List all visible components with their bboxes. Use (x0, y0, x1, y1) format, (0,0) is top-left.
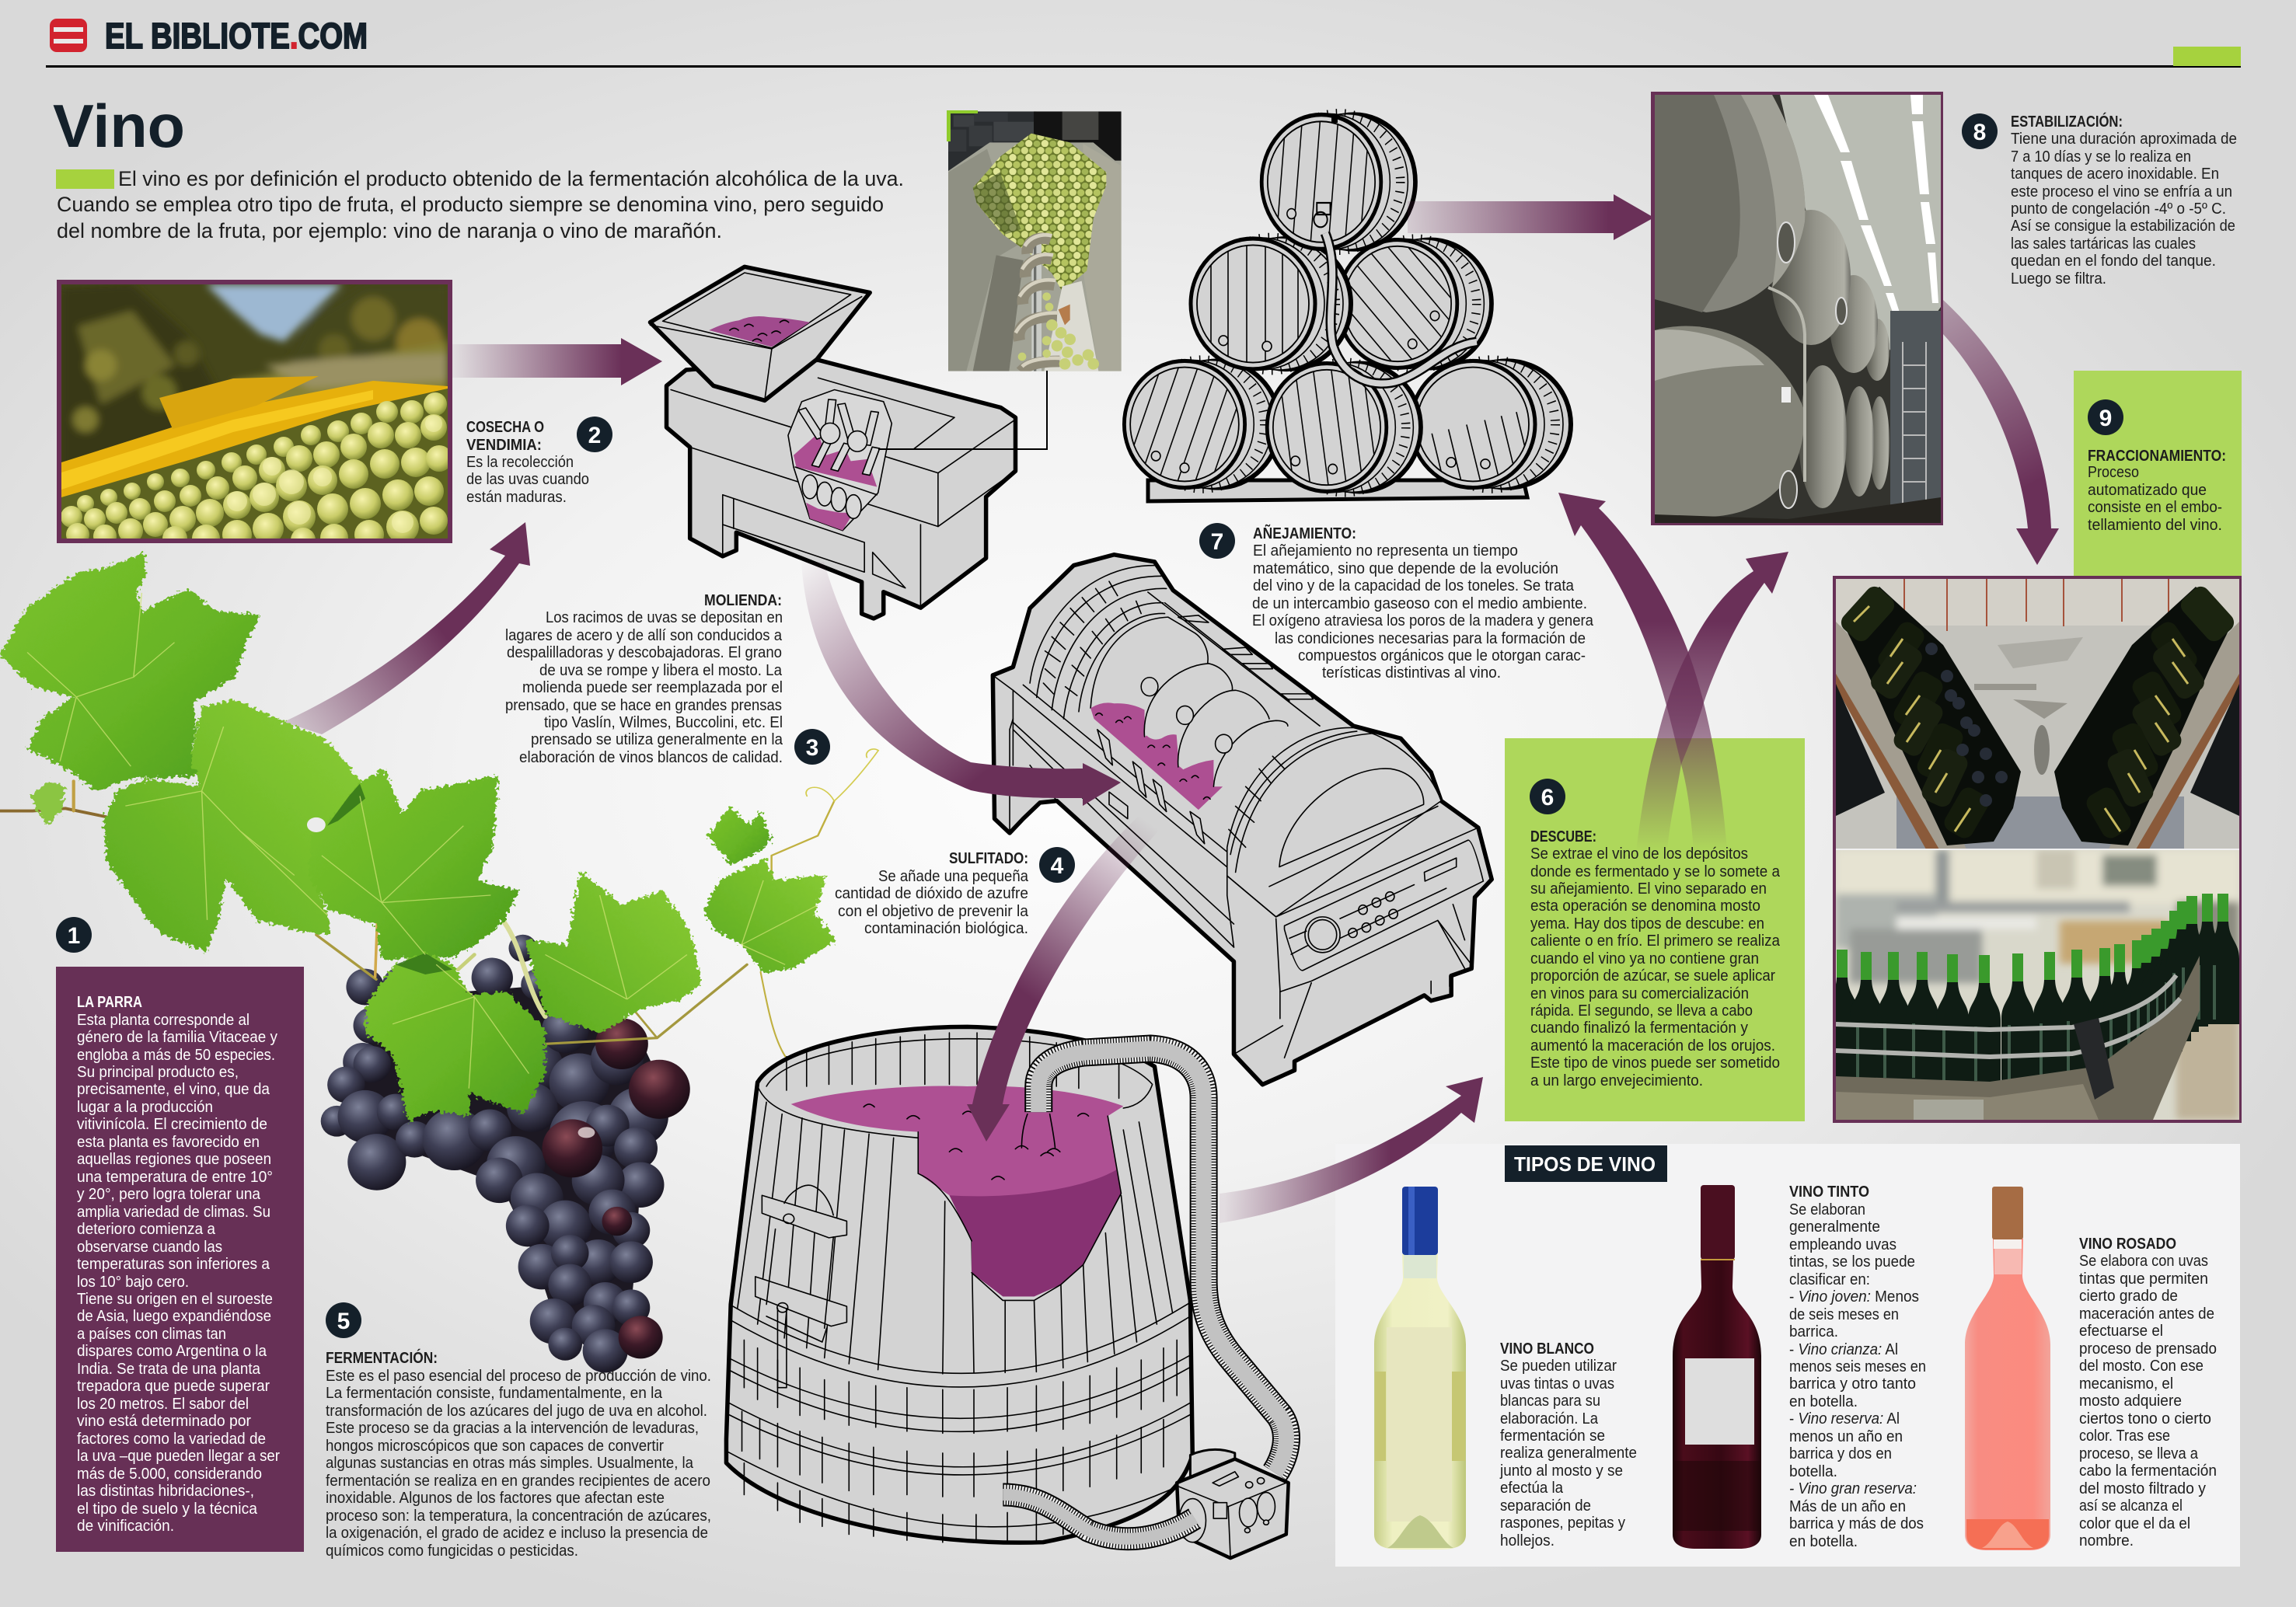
text: vino rosado: proceso, se lleva a (2079, 1445, 2199, 1462)
text: estabilizacion: Tiene una duración aproximada de (2011, 131, 2237, 148)
number 4: 4 (1051, 853, 1064, 879)
text: vino tinto: - Vino crianza: Al (1789, 1341, 1898, 1358)
text: fermentacion: químicos como fungicidas o pesticidas. (326, 1543, 578, 1560)
text: vino tinto: en botella. (1789, 1393, 1858, 1410)
panel: la parra: vino está determinado por (77, 1413, 251, 1430)
text: vino tinto: clasificar en: (1789, 1271, 1870, 1288)
intro text (56, 167, 904, 242)
text: fermentacion: FERMENTACIÓN: (326, 1348, 438, 1367)
panel: descube: proporción de azúcar, se suele aplicar (1530, 967, 1775, 985)
panel: la parra: la uva –que pueden llegar a ser (77, 1448, 280, 1465)
text: sulfitado: con el objetivo de prevenir la (838, 903, 1029, 920)
panel: la parra: los 10° bajo cero. (77, 1274, 189, 1291)
text: anejamiento: del vino y de la capacidad de los toneles. Se trata (1253, 577, 1575, 594)
text: vino rosado: maceración antes de (2079, 1305, 2214, 1323)
connector line (878, 371, 1047, 449)
header rule (46, 65, 2241, 68)
text: vino tinto: - Vino joven: Menos (1789, 1288, 1919, 1305)
text: vino tinto: barrica y otro tanto (1789, 1375, 1916, 1393)
text: vino tinto (1789, 1183, 1926, 1550)
barrel bottom middle (1267, 350, 1421, 505)
text: anejamiento: compuestos orgánicos que le otorgan carac- (1298, 647, 1586, 664)
panel: la parra: de vinificación. (77, 1518, 174, 1535)
text: estabilizacion: este proceso el vino se enfría a un (2011, 183, 2232, 200)
number 5 (326, 1302, 361, 1338)
heading: TIPOS DE VINO (1514, 1152, 1656, 1176)
text: vino tinto: en botella. (1789, 1533, 1858, 1550)
arrow: vat to descube (1220, 1077, 1483, 1223)
text: anejamiento: de un intercambio gaseoso con el medio ambiente. (1252, 595, 1587, 612)
text: vino tinto: generalmente (1789, 1218, 1880, 1236)
arrow: vine to harvest (284, 522, 530, 734)
panel: fraccionamiento: tellamiento del vino. (2088, 517, 2222, 534)
arrow: harvest to crusher (452, 338, 662, 385)
photo frame: bottling (1826, 576, 2242, 1123)
panel: descube: caliente o en frío. El primero se realiza (1530, 932, 1781, 950)
text: molienda: prensado se utiliza generalmente en la (531, 731, 783, 748)
text: fermentacion: Este proceso se da gracias a la intervención de levaduras, (326, 1420, 699, 1437)
text: vino blanco: VINO BLANCO (1500, 1340, 1594, 1358)
text: vino rosado: del mosto. Con ese (2079, 1358, 2204, 1375)
photo: grape harvest (57, 280, 452, 553)
number 1: 1 (68, 923, 80, 949)
text: vino rosado: VINO ROSADO (2079, 1236, 2176, 1253)
text: vino blanco: Se pueden utilizar (1500, 1358, 1617, 1375)
text: vino blanco (1499, 1340, 1637, 1549)
panel: descube: Se extrae el vino de los depósitos (1530, 845, 1748, 863)
text: vino blanco: fermentación se (1500, 1427, 1605, 1445)
text: estabilizacion: quedan en el fondo del tanque. (2011, 253, 2216, 270)
text: estabilizacion: tanques de acero inoxidable. En (2011, 166, 2219, 183)
number 9: 9 (2099, 406, 2112, 431)
bottle: red (1673, 1185, 1761, 1549)
pipe (1325, 233, 1477, 384)
panel: fraccionamiento (2074, 371, 2242, 577)
heading (1505, 1145, 1667, 1182)
panel: la parra: Su principal producto es, (77, 1064, 239, 1081)
text: vino rosado: mosto adquiere (2079, 1393, 2182, 1410)
wine in drum (1090, 702, 1223, 810)
header green tab (2173, 47, 2241, 66)
panel: descube: cuando el vino ya no contiene gran (1530, 950, 1759, 967)
green corner (947, 110, 978, 141)
panel: fraccionamiento: automatizado que (2088, 482, 2207, 499)
text: cosecha: Es la recolección (466, 454, 574, 471)
panel: la parra: las distintas hibridaciones-, (77, 1483, 254, 1500)
text: vino rosado: Se elabora con uvas (2079, 1253, 2208, 1270)
text: sulfitado: contaminación biológica. (864, 920, 1028, 937)
text: fermentacion: la oxigenación, el grado de acidez e incluso la presencia de (326, 1525, 708, 1542)
text: vino blanco: efectúa la (1500, 1480, 1564, 1497)
leaves (0, 553, 878, 1123)
panel: fraccionamiento: consiste en el embo- (2088, 499, 2222, 516)
panel: la parra: lugar a la producción (77, 1099, 213, 1116)
text: vino tinto: Más de un año en (1789, 1498, 1906, 1515)
panel: descube: su añejamiento. El vino separado en (1530, 880, 1767, 898)
panel: la parra: LA PARRA (77, 994, 142, 1011)
text: vino rosado: efectuarse el (2079, 1323, 2163, 1340)
barrel middle right (1345, 235, 1494, 373)
text: vino tinto: - Vino reserva: Al (1789, 1410, 1900, 1427)
text: vino rosado: color. Tras ese (2079, 1427, 2170, 1445)
panel: la parra: una temperatura de entre 10° (77, 1169, 273, 1186)
text: vino tinto: de seis meses en (1789, 1306, 1899, 1323)
barrel middle left (1191, 230, 1351, 378)
panel: descube: rápida. El segundo, se lleva a cabo (1530, 1002, 1753, 1020)
text: vino rosado: proceso de prensado (2079, 1340, 2217, 1358)
text: vino blanco: hollejos. (1500, 1532, 1555, 1549)
number 8: 8 (1973, 120, 1986, 145)
text: sulfitado: SULFITADO: (949, 850, 1028, 867)
text: estabilizacion: punto de congelación -4º o -5º C. (2011, 200, 2226, 218)
text: anejamiento: El oxígeno atraviesa los poros de la madera y genera (1252, 612, 1594, 629)
panel: la parra: género de la familia Vitaceae y (77, 1029, 277, 1046)
text: fermentacion: proceso son: la temperatura, la concentración de azúcares, (326, 1508, 711, 1525)
text: molienda: lagares de acero y de allí son conducidos a (505, 627, 783, 644)
text: vino blanco: junto al mosto y se (1499, 1462, 1623, 1480)
text: vino rosado: así se alcanza el (2079, 1497, 2183, 1515)
crusher illustration (650, 267, 1015, 619)
panel: la parra (56, 967, 304, 1552)
text: vino blanco: realiza generalmente (1500, 1445, 1637, 1462)
text: vino tinto: Se elaboran (1789, 1201, 1865, 1218)
photo: riddling racks (1836, 579, 2239, 849)
text: fermentacion: inoxidable. Algunos de los factores que afectan este (326, 1490, 665, 1507)
panel: la parra: más de 5.000, considerando (77, 1466, 262, 1483)
intro text: El vino es por definición el producto obtenido de la fermentación alcohólica de la uva. (118, 167, 904, 190)
text: vino blanco: blancas para su (1500, 1393, 1600, 1410)
text: vino rosado: mecanismo, el (2079, 1375, 2173, 1393)
base (1148, 480, 1527, 501)
text: vino tinto: tintas, se los puede (1789, 1253, 1915, 1271)
stems and tendrils (0, 749, 878, 1056)
number 8 (1962, 113, 1998, 149)
text: fermentacion: hongos microscópicos que son capaces de convertir (326, 1438, 664, 1455)
text: vino rosado (2079, 1236, 2217, 1549)
text: vino rosado: cabo la fermentación (2079, 1462, 2217, 1480)
bottle: white (1374, 1187, 1466, 1549)
text: anejamiento: matemático, sino que depende de la evolución (1253, 560, 1558, 577)
panel: la parra: a países con climas tan (77, 1326, 226, 1343)
text: sulfitado: cantidad de dióxido de azufre (835, 885, 1028, 902)
photo: bottling line (1826, 850, 2239, 1120)
text: sulfitado (835, 850, 1029, 937)
number 3: 3 (806, 735, 818, 761)
panel: la parra: precisamente, el vino, que da (77, 1081, 270, 1098)
panel: la parra: esta planta es favorecido en (77, 1134, 260, 1151)
text: molienda: prensado, que se hace en grandes prensas (505, 697, 782, 714)
text: cosecha (466, 419, 589, 506)
number 7 (1199, 523, 1235, 559)
panel: la parra: observarse cuando las (77, 1239, 222, 1256)
panel: descube: en vinos para su comercialización (1530, 985, 1749, 1002)
front dome (1227, 727, 1441, 917)
text: vino tinto: barrica y más de dos (1789, 1515, 1924, 1532)
number 4 (1039, 847, 1075, 883)
text: vino rosado: nombre. (2079, 1532, 2134, 1549)
text: molienda: tipo Vaslín, Wilmes, Buccolini, etc. El (544, 714, 783, 731)
text: vino tinto: botella. (1789, 1463, 1837, 1480)
press illustration (993, 555, 1492, 1085)
number 5: 5 (337, 1309, 350, 1334)
text: molienda: molienda puede ser reemplazada por el (522, 679, 783, 696)
panel: descube: donde es fermentado y se lo somete a (1530, 863, 1781, 880)
arrow pair: descube to barrels and tank (1558, 493, 1788, 851)
panel: descube (1505, 738, 1805, 1121)
number 2: 2 (588, 423, 601, 448)
text: vino tinto: empleando uvas (1789, 1236, 1896, 1253)
photo: screw conveyor (948, 111, 1122, 371)
text: vino tinto: barrica. (1789, 1323, 1838, 1340)
barrel bottom left (1122, 355, 1275, 493)
panel: descube: Este tipo de vinos puede ser sometido (1530, 1054, 1780, 1072)
text: molienda: despalilladoras y descobajadoras. El grano (507, 644, 782, 661)
grapes in hopper (709, 316, 810, 347)
panel: la parra: India. Se trata de una planta (77, 1361, 261, 1378)
text: cosecha: están maduras. (466, 489, 567, 506)
panel: la parra: los 20 metros. El sabor del (77, 1396, 249, 1413)
intro text: del nombre de la fruta, por ejemplo: vino de naranja o vino de marañón. (57, 219, 722, 242)
panel: descube: yema. Hay dos tipos de descube: en (1530, 915, 1764, 932)
text: fermentacion: algunas sustancias en otras más simples. Usualmente, la (326, 1455, 694, 1472)
text: vino tinto: - Vino gran reserva: (1789, 1480, 1917, 1497)
text: sulfitado: Se añade una pequeña (878, 868, 1029, 885)
text: vino blanco: raspones, pepitas y (1500, 1515, 1625, 1532)
arrow: press to vat (967, 816, 1161, 1142)
text: fermentacion (326, 1348, 711, 1560)
text: vino blanco: separación de (1500, 1497, 1591, 1515)
text: molienda (505, 592, 783, 766)
text: estabilizacion (2011, 112, 2237, 288)
pump box (1177, 1449, 1289, 1558)
text: anejamiento: terísticas distintivas al vino. (1322, 664, 1501, 681)
cutaway rollers (788, 390, 892, 531)
title: Vino (53, 92, 185, 160)
text: estabilizacion: las sales tartáricas las cuales (2011, 235, 2196, 253)
text: fermentacion: La fermentación consiste, fundamentalmente, en la (326, 1385, 663, 1402)
panel: descube: esta operación se denomina mosto (1530, 898, 1760, 915)
text: molienda: Los racimos de uvas se depositan en (546, 609, 783, 626)
intro text: Cuando se emplea otro tipo de fruta, el producto siempre se denomina vino, pero seguido (57, 193, 884, 216)
panel: la parra: y 20°, pero logra tolerar una (77, 1186, 261, 1203)
text: cosecha: VENDIMIA: (466, 437, 542, 454)
number 6 (1530, 779, 1565, 814)
text: estabilizacion: Así se consigue la estabilización de (2011, 218, 2235, 235)
text: estabilizacion: Luego se filtra. (2011, 270, 2106, 288)
hose (1038, 1048, 1286, 1473)
number 1 (56, 917, 92, 953)
panel: la parra: deterioro comienza a (77, 1221, 216, 1238)
text: vino tinto: menos un año en (1789, 1428, 1903, 1445)
text: vino rosado: ciertos tono o cierto (2079, 1410, 2211, 1427)
text: vino rosado: color que el da el (2079, 1515, 2190, 1532)
text: vino rosado: tintas que permiten (2079, 1271, 2208, 1288)
number 9 (2088, 399, 2123, 435)
panel: la parra: amplia variedad de climas. Su (77, 1204, 270, 1221)
text: vino blanco: uvas tintas o uvas (1500, 1375, 1614, 1393)
text: anejamiento: las condiciones necesarias para la formación de (1275, 630, 1586, 647)
text: cosecha: de las uvas cuando (466, 471, 589, 488)
number 3 (794, 729, 830, 765)
arrow: crusher to press (801, 562, 1121, 806)
number 7: 7 (1211, 529, 1223, 555)
panel: descube: aumentó la maceración de los orujos. (1530, 1037, 1775, 1054)
text: molienda: elaboración de vinos blancos de calidad. (519, 749, 783, 766)
text: estabilizacion: ESTABILIZACIÓN: (2011, 112, 2123, 131)
text: estabilizacion: 7 a 10 días y se lo realiza en (2011, 148, 2191, 166)
panel: la parra: de Asia, luego expandiéndose (77, 1308, 271, 1325)
panel: la parra: temperaturas son inferiores a (77, 1256, 270, 1273)
text: vino tinto: VINO TINTO (1789, 1183, 1869, 1201)
panel: la parra: trepadora que puede superar (77, 1378, 270, 1395)
panel: la parra: vitivinícola. El crecimiento de (77, 1116, 267, 1133)
text: molienda: de uva se rompe y libera el mosto. La (539, 662, 783, 679)
arrow: barrels to tanks (1408, 194, 1654, 240)
panel: la parra: Esta planta corresponde al (77, 1012, 249, 1029)
number 6: 6 (1541, 785, 1554, 810)
text: cosecha: COSECHA O (466, 419, 544, 436)
panel: descube: a un largo envejecimiento. (1530, 1072, 1703, 1089)
panel: la parra: Tiene su origen en el suroeste (77, 1291, 273, 1308)
panel: la parra: aquellas regiones que poseen (77, 1151, 271, 1168)
bottle: rose (1965, 1187, 2050, 1550)
photo: steel tanks (1651, 92, 1943, 525)
panel: descube: cuando finalizó la fermentación y (1530, 1020, 1748, 1037)
text: fermentacion: fermentación se realiza en en grandes recipientes de acero (326, 1473, 710, 1490)
panel: descube: DESCUBE: (1530, 828, 1596, 845)
text: vino rosado: cierto grado de (2079, 1288, 2178, 1305)
text: fermentacion: transformación de los azúcares del jugo de uva en alcohol. (326, 1403, 707, 1420)
panel: la parra: engloba a más de 50 especies. (77, 1047, 275, 1064)
header logo: EL BIBLIOTE.COM (105, 16, 368, 56)
text: anejamiento: El añejamiento no representa un tiempo (1253, 542, 1518, 559)
arrow: tanks to bottling (1943, 300, 2059, 565)
panel: tipos de vino (1335, 1144, 2240, 1567)
panel: fraccionamiento: Proceso (2088, 464, 2139, 481)
text: vino tinto: menos seis meses en (1789, 1358, 1926, 1375)
text: anejamiento (1252, 525, 1594, 681)
text: vino blanco: elaboración. La (1500, 1410, 1599, 1427)
text: molienda: MOLIENDA: (704, 592, 782, 609)
vine with leaves and grapes (0, 553, 878, 1373)
panel: la parra: dispares como Argentina o la (77, 1343, 267, 1360)
panel: la parra: factores como la variedad de (77, 1431, 266, 1448)
panel: fraccionamiento: FRACCIONAMIENTO: (2088, 448, 2226, 465)
vat illustration (726, 1027, 1289, 1558)
wine (791, 1086, 1123, 1296)
text: vino tinto: barrica y dos en (1789, 1445, 1892, 1462)
text: vino rosado: del mosto filtrado y (2079, 1480, 2206, 1497)
barrels illustration (1123, 103, 1571, 510)
barrel top (1261, 103, 1415, 261)
panel: la parra: el tipo de suelo y la técnica (77, 1501, 258, 1518)
text: fermentacion: Este es el paso esencial del proceso de producción de vino. (326, 1368, 711, 1385)
barrel bottom right (1411, 360, 1571, 510)
text: anejamiento: AÑEJAMIENTO: (1253, 525, 1356, 542)
number 2 (577, 417, 612, 452)
grapes (321, 935, 690, 1373)
